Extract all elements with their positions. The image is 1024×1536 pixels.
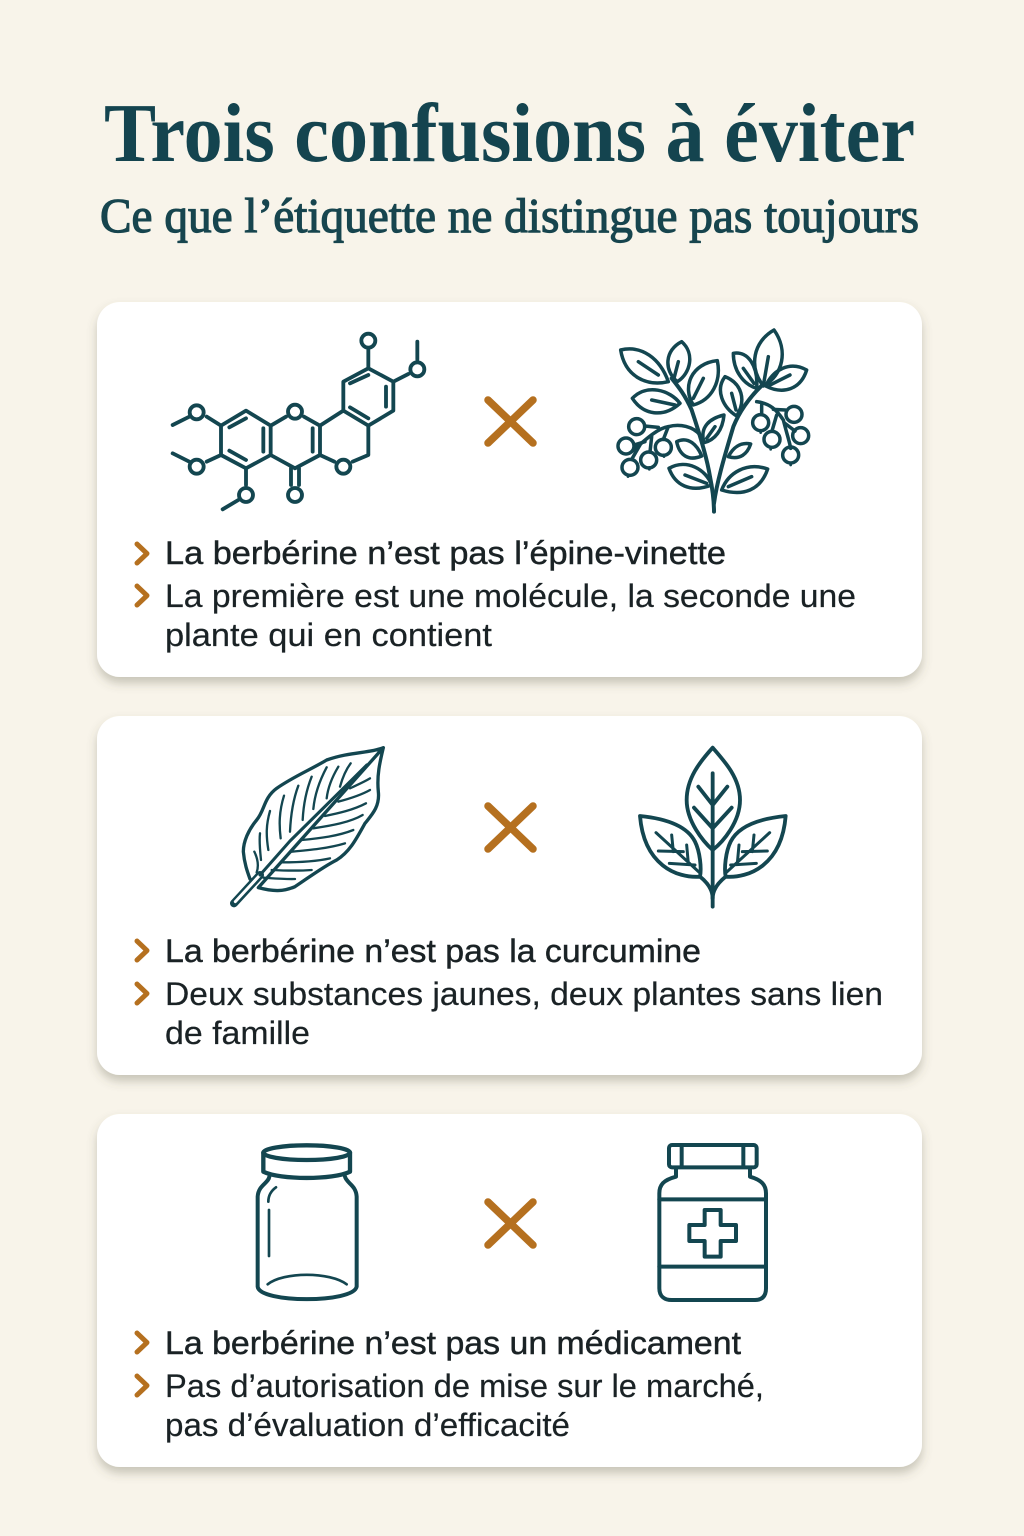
bullet list: berbérine vs épine-vinette <box>137 535 856 653</box>
icon: molecule <box>173 334 424 509</box>
bullet list: berbérine vs curcumine: de famille <box>165 1015 310 1051</box>
panel: berbérine vs curcumine <box>97 716 922 1075</box>
bullet list: berbérine vs médicament: Pas d’autorisation de mise sur le marché, <box>165 1368 764 1404</box>
bullet list: berbérine vs curcumine: Deux substances jaunes, deux plantes sans lien <box>165 976 883 1012</box>
panel: berbérine vs épine-vinette <box>97 302 922 677</box>
icon: cross <box>488 1202 533 1245</box>
icon: empty jar <box>258 1145 357 1299</box>
icon: long leaf <box>234 748 383 903</box>
bullet list: berbérine vs médicament: pas d’évaluation d’efficacité <box>165 1407 570 1443</box>
bullet list: berbérine vs curcumine: La berbérine n’est pas la curcumine <box>165 933 701 969</box>
icon: cross <box>488 400 533 443</box>
bullet list: berbérine vs épine-vinette: La berbérine n’est pas l’épine-vinette <box>165 535 726 571</box>
icon: cross <box>488 806 533 849</box>
panel: berbérine vs médicament <box>97 1114 922 1467</box>
icon: three-leaf plant <box>640 748 786 907</box>
icon: barberry plant <box>618 330 809 512</box>
bullet list: berbérine vs épine-vinette: La première est une molécule, la seconde une <box>165 578 856 614</box>
bullet list: berbérine vs épine-vinette: plante qui en contient <box>165 617 492 653</box>
subtitle: Ce que l’étiquette ne distingue pas toujours <box>100 188 919 243</box>
bullet list: berbérine vs curcumine <box>137 933 883 1051</box>
icon: medicine bottle <box>659 1145 766 1300</box>
bullet list: berbérine vs médicament <box>137 1325 764 1443</box>
title: Trois confusions à éviter <box>104 87 915 180</box>
bullet list: berbérine vs médicament: La berbérine n’est pas un médicament <box>165 1325 741 1361</box>
